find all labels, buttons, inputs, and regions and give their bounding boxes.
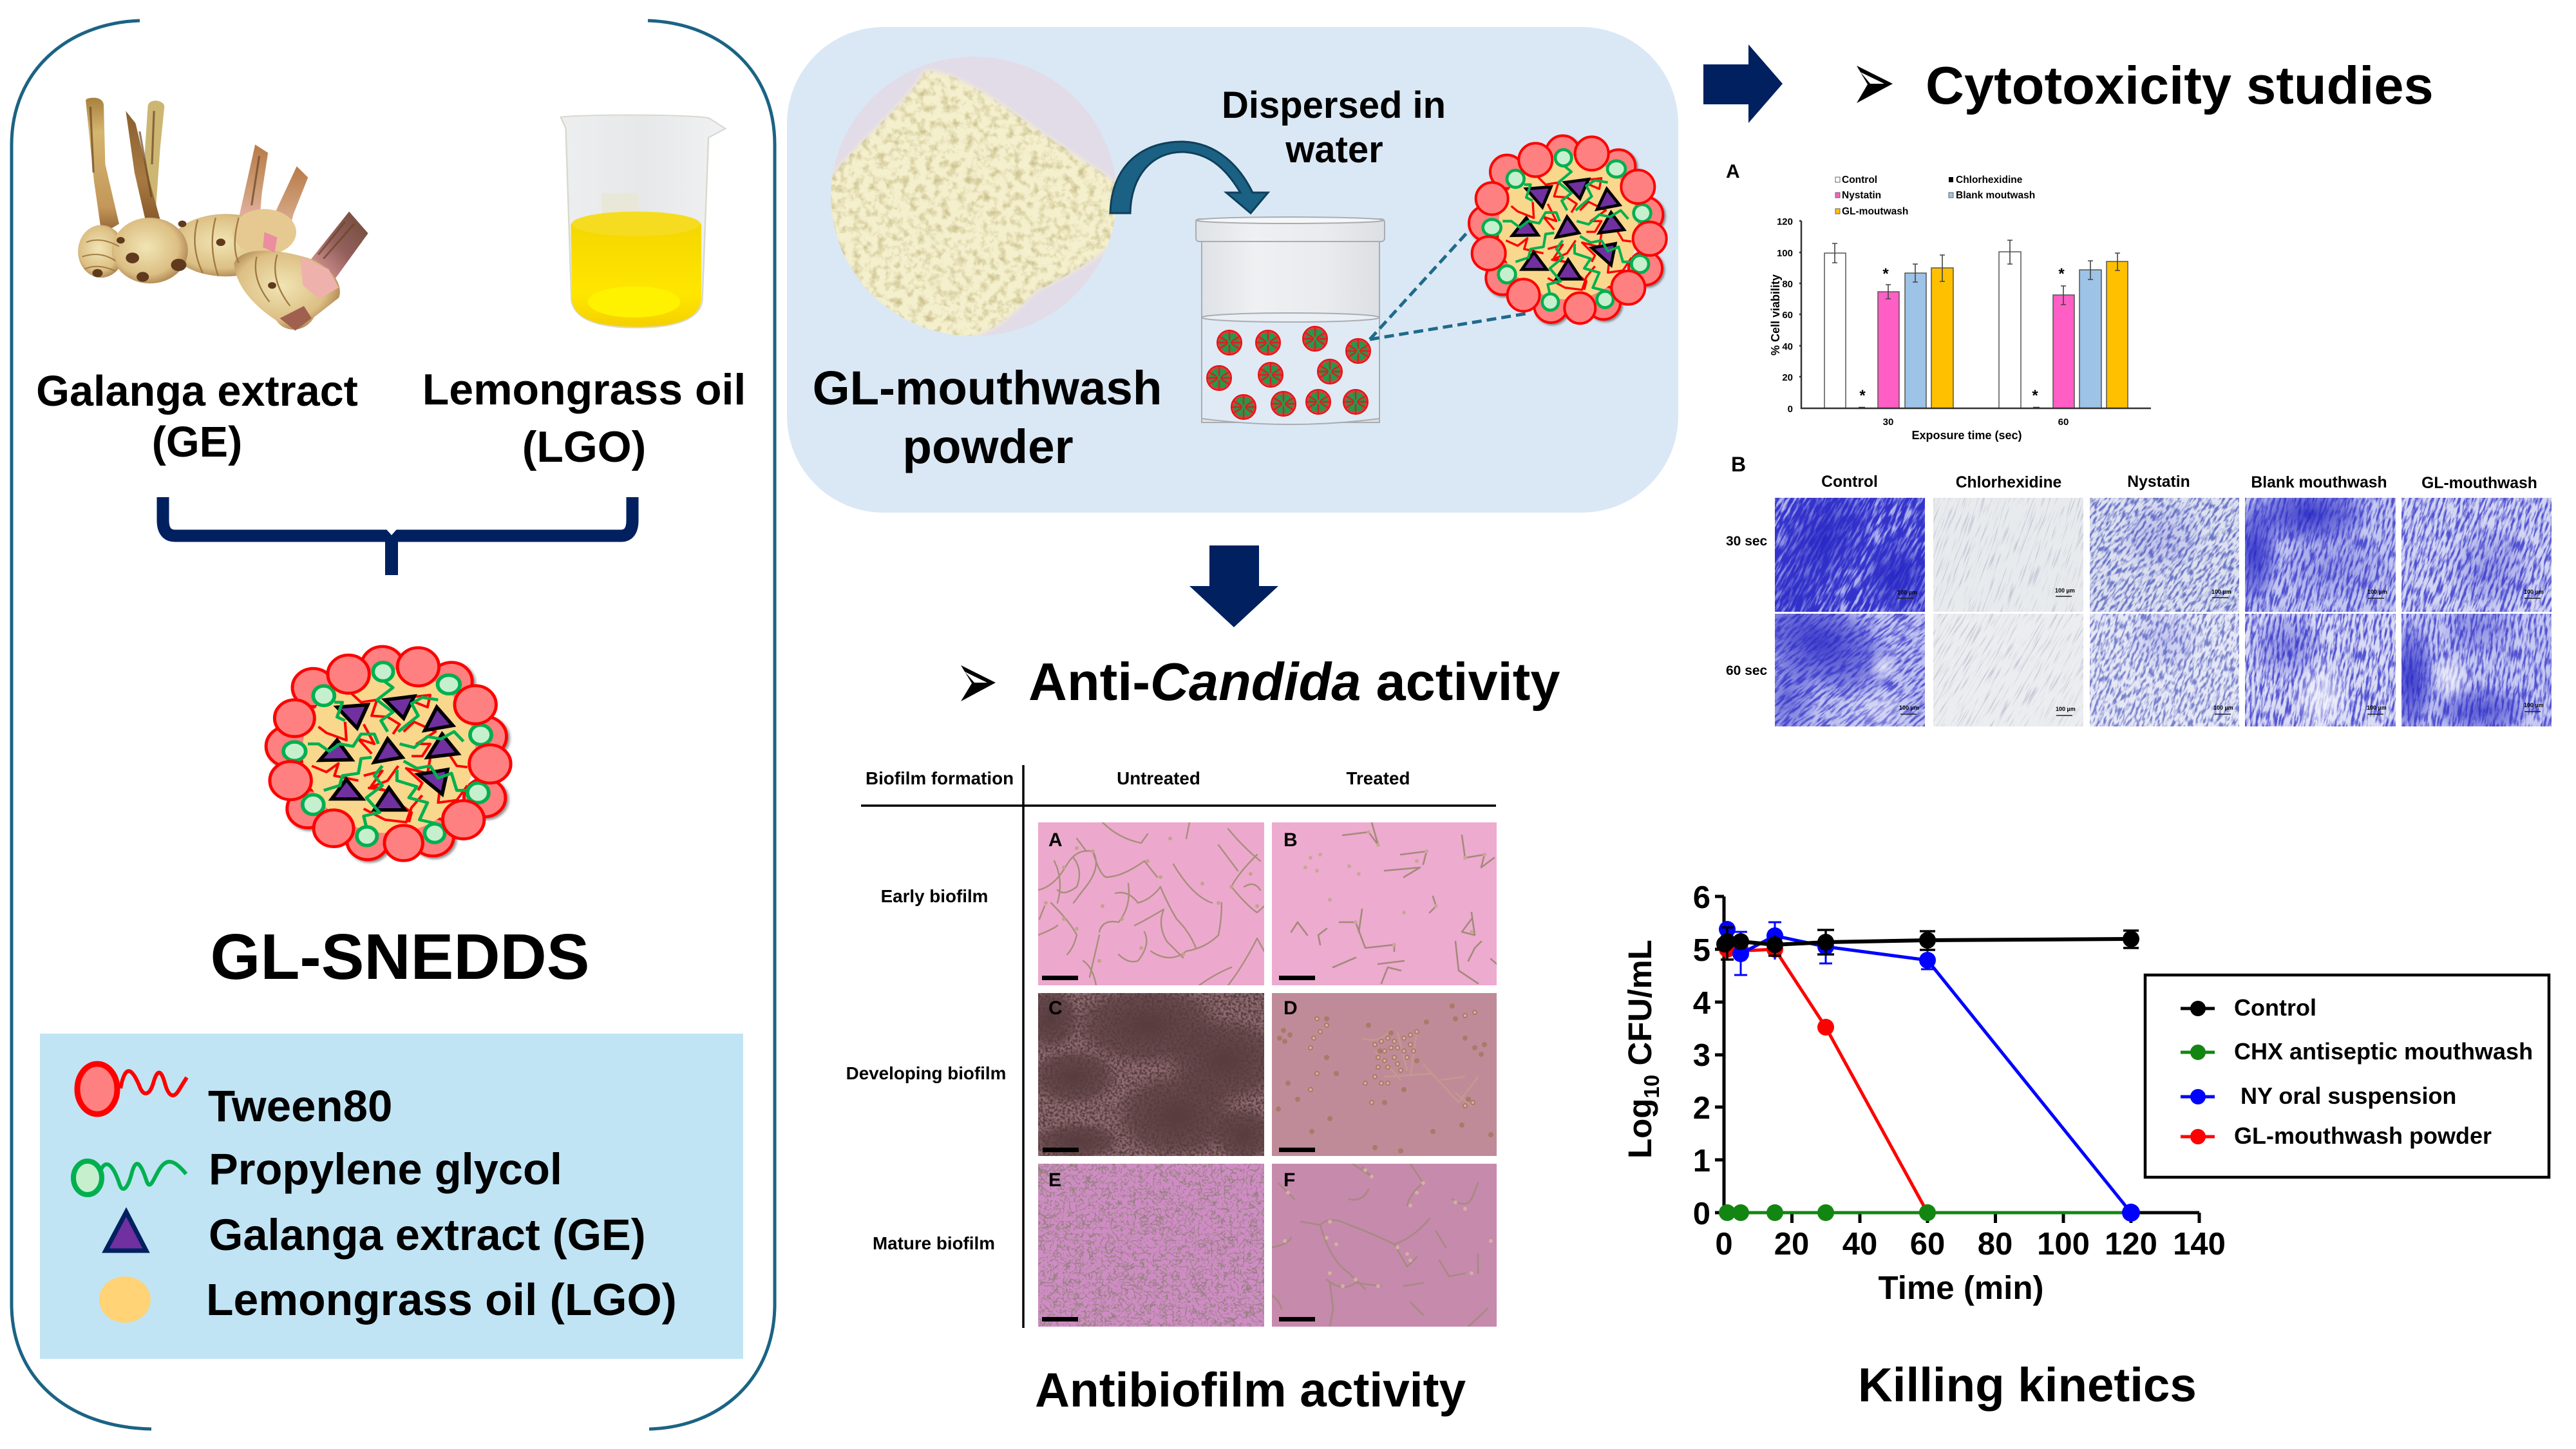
legend: killing kinetics: GL-mouthwash powder xyxy=(2234,1122,2492,1149)
axis numbers: 4 xyxy=(1693,986,1710,1021)
heading: antibiofilm activity: Antibiofilm activity xyxy=(1035,1363,1466,1417)
axis numbers: 0 xyxy=(1715,1227,1733,1262)
icon: joining bracket xyxy=(163,497,632,536)
chart: cell viability bars: % Cell viability xyxy=(1769,274,1782,355)
axis numbers: 6 xyxy=(1693,880,1710,915)
text: dispersed in water: Dispersed in xyxy=(1222,84,1446,126)
micrograph: C developing untreated xyxy=(1038,993,1264,1156)
axis numbers: 1 xyxy=(1693,1144,1710,1179)
legend: killing kinetics: NY oral suspension xyxy=(2240,1083,2456,1109)
panel: cell staining micrographs: Blank mouthwash xyxy=(2251,474,2387,491)
micrograph: control 30 sec: 100 µm xyxy=(1897,589,1917,596)
panel: cell staining micrographs: Chlorhexidine xyxy=(1956,474,2061,491)
text: galanga extract label xyxy=(36,368,358,466)
micrograph: control 30 sec xyxy=(1775,498,1925,612)
heading: anti-Candida activity: Anti-Candida activity xyxy=(1028,652,1560,712)
chart: killing kinetics xyxy=(1622,880,2549,1306)
axis numbers: 80 xyxy=(1978,1227,2012,1262)
chart: cell viability bars: * xyxy=(1882,265,1889,283)
panel: component legend xyxy=(40,1034,743,1359)
axis title: log CFU: 10 xyxy=(1640,1075,1663,1099)
panel: cell staining micrographs: Nystatin xyxy=(2127,473,2190,491)
legend: killing kinetics: CHX antiseptic mouthwash xyxy=(2234,1038,2533,1065)
axes and tick marks xyxy=(1715,896,2199,1223)
micrograph: GL-mouthwash 60 sec xyxy=(2401,614,2552,726)
icon: galanga rhizome xyxy=(78,98,368,330)
micrograph: nystatin 30 sec xyxy=(2090,498,2239,612)
text: propylene glycol: Propylene glycol xyxy=(209,1144,562,1194)
series: control xyxy=(1716,927,2139,960)
micrograph: nystatin 30 sec: 100 µm xyxy=(2211,589,2231,595)
axis numbers: 3 xyxy=(1693,1038,1710,1073)
axis numbers: 0 xyxy=(1693,1197,1710,1231)
chart: cell viability bars: 40 xyxy=(1782,341,1793,352)
micrograph: chlorhexidine 30 sec xyxy=(1933,498,2083,612)
micrograph: F mature treated xyxy=(1272,1164,1497,1327)
text: lemongrass oil label: (LGO) xyxy=(522,422,646,471)
micrograph: blank mouthwash 30 sec xyxy=(2245,498,2396,612)
panel: cell staining micrographs: 60 sec xyxy=(1726,663,1768,678)
micrograph: blank mouthwash 30 sec: 100 µm xyxy=(2367,589,2387,595)
legend: viability xyxy=(1835,175,2035,217)
legend: viability: GL-moutwash xyxy=(1842,206,1908,217)
icon: bracket notch xyxy=(386,529,397,535)
chart: cell viability bars: 20 xyxy=(1782,372,1793,383)
arrow: to cytotoxicity xyxy=(1703,44,1783,123)
text: GL-mouthwash powder: powder xyxy=(902,419,1074,473)
text: dispersed in water xyxy=(1222,84,1446,171)
text: GL-mouthwash powder xyxy=(813,361,1162,473)
chart: cell viability bars: 100 xyxy=(1777,248,1793,259)
chart: cell viability bars: * xyxy=(2032,387,2038,404)
micrograph: chlorhexidine 60 sec xyxy=(1933,614,2083,726)
axis numbers: 20 xyxy=(1774,1227,1809,1262)
panel: cell staining micrographs: GL-mouthwash xyxy=(2421,475,2537,492)
legend: viability: Chlorhexidine xyxy=(1956,175,2023,185)
axis numbers: 2 xyxy=(1693,1091,1710,1126)
legend: killing kinetics xyxy=(2145,975,2549,1177)
text: GL-mouthwash powder: GL-mouthwash xyxy=(813,361,1162,415)
chart: cell viability bars: Exposure time (sec) xyxy=(1911,429,2022,442)
text: galanga extract label: Galanga extract xyxy=(36,368,358,415)
text: lemongrass oil label xyxy=(422,365,746,471)
axis numbers: 100 xyxy=(2037,1227,2090,1262)
chart: cell viability bars: 60 xyxy=(1782,310,1793,321)
micrograph: control 60 sec xyxy=(1775,614,1925,726)
axis numbers xyxy=(1693,880,2226,1262)
series: NY oral suspension xyxy=(1719,921,2140,1222)
table: biofilm formation micrographs: Treated xyxy=(1347,768,1410,788)
panel: GL-mouthwash powder xyxy=(787,27,1678,513)
table: biofilm formation micrographs: Early biofilm xyxy=(881,886,988,906)
micrograph: nystatin 60 sec xyxy=(2090,614,2239,726)
axis numbers: 140 xyxy=(2173,1227,2226,1262)
text: Tween80: Tween80 xyxy=(208,1081,392,1131)
heading: GL-SNEDDS: GL-SNEDDS xyxy=(211,921,589,993)
text: galanga extract: Galanga extract (GE) xyxy=(209,1210,646,1260)
micrograph: B early treated xyxy=(1272,822,1497,985)
text: lemongrass oil: Lemongrass oil (LGO) xyxy=(206,1274,677,1325)
micrograph: B early treated: B xyxy=(1283,829,1298,851)
chart: cell viability bars: 30 xyxy=(1883,417,1893,428)
series: GL-mouthwash powder xyxy=(1719,941,1936,1221)
chart: cell viability bars: 120 xyxy=(1777,216,1793,227)
micrograph: D developing treated xyxy=(1272,993,1497,1156)
chart: cell viability bars xyxy=(1726,161,2151,442)
chart: cell viability bars: 0 xyxy=(1788,404,1793,415)
legend: viability: Nystatin xyxy=(1842,190,1881,201)
heading: killing kinetics: Killing kinetics xyxy=(1858,1358,2197,1412)
chart: cell viability bars: 60 xyxy=(2058,417,2069,428)
axis title: time: Time (min) xyxy=(1879,1269,2043,1306)
table: biofilm formation micrographs: Biofilm formation xyxy=(866,768,1014,788)
micrograph: F mature treated: F xyxy=(1283,1170,1295,1191)
text: dispersed in water: water xyxy=(1285,129,1383,171)
micrograph: chlorhexidine 60 sec: 100 µm xyxy=(2056,706,2076,712)
axis numbers: 120 xyxy=(2105,1227,2157,1262)
panel: ingredients frame xyxy=(12,21,775,1429)
icon: powder photo xyxy=(828,57,1122,341)
chart: cell viability bars: * xyxy=(2058,265,2065,283)
micrograph: GL-mouthwash 30 sec: 100 µm xyxy=(2524,589,2544,595)
table: biofilm formation micrographs xyxy=(846,765,1501,1449)
icon: galanga extract triangle xyxy=(106,1212,146,1251)
icon: beaker of lemongrass oil xyxy=(561,115,725,328)
micrograph: control 60 sec: 100 µm xyxy=(1899,705,1919,711)
micrograph: blank mouthwash 60 sec xyxy=(2245,614,2396,726)
chart: cell viability bars: * xyxy=(1859,387,1866,404)
micrograph: A early untreated: A xyxy=(1048,829,1063,851)
chart: cell viability bars: 80 xyxy=(1782,279,1793,290)
axis numbers: 40 xyxy=(1842,1227,1877,1262)
legend: killing kinetics: Control xyxy=(2234,994,2316,1021)
axis title: log CFU: Log xyxy=(1622,1099,1658,1159)
bars: viability values xyxy=(1824,252,2128,408)
panel: cell staining micrographs xyxy=(1647,349,2576,873)
icon: propylene glycol xyxy=(73,1161,186,1195)
micrograph: chlorhexidine 30 sec: 100 µm xyxy=(2055,587,2075,594)
panel: cell staining micrographs: 30 sec xyxy=(1726,534,1768,549)
text: galanga extract label: (GE) xyxy=(152,419,242,466)
panel: cell staining micrographs: B xyxy=(1731,453,1746,476)
text: lemongrass oil label: Lemongrass oil xyxy=(422,365,746,414)
icon: lemongrass oil droplet xyxy=(99,1276,151,1323)
micrograph: E mature untreated: E xyxy=(1048,1170,1061,1191)
micrograph: blank mouthwash 60 sec: 100 µm xyxy=(2367,705,2387,711)
micrograph: nystatin 60 sec: 100 µm xyxy=(2213,705,2233,711)
icon: jar of dispersed particles xyxy=(1196,217,1385,424)
micrograph: D developing treated: D xyxy=(1283,998,1298,1019)
arrow: curved dispersal arrow xyxy=(1110,142,1268,213)
heading: cytotoxicity studies: Cytotoxicity studies xyxy=(1926,55,2434,115)
micrograph: C developing untreated: C xyxy=(1048,998,1063,1019)
icon: anti-Candida bullet xyxy=(961,665,996,701)
callout: magnification dashed lines xyxy=(1370,230,1526,339)
micrograph: GL-mouthwash 30 sec xyxy=(2401,498,2552,612)
table: biofilm formation micrographs: Developing biofilm xyxy=(846,1063,1006,1083)
axis title: log CFU: CFU/mL xyxy=(1622,940,1658,1075)
table: biofilm formation micrographs: Untreated xyxy=(1117,768,1200,788)
icon: enlarged nanoparticle xyxy=(1469,136,1667,323)
icon: GL-SNEDDS nanoparticle xyxy=(266,647,511,860)
icon: Tween80 xyxy=(77,1064,187,1114)
micrograph: A early untreated xyxy=(1038,822,1264,985)
panel: cell staining micrographs: Control xyxy=(1821,473,1878,491)
icon: cytotoxicity bullet xyxy=(1857,66,1893,103)
axis numbers: 5 xyxy=(1693,933,1710,968)
table: biofilm formation micrographs: Mature biofilm xyxy=(873,1233,995,1253)
icon: bracket stem xyxy=(380,540,403,575)
axis numbers: 60 xyxy=(1910,1227,1945,1262)
chart: cell viability bars: A xyxy=(1726,161,1740,182)
micrograph: GL-mouthwash 60 sec: 100 µm xyxy=(2524,702,2544,708)
micrograph: E mature untreated xyxy=(1038,1164,1264,1327)
legend: viability: Blank moutwash xyxy=(1956,190,2035,201)
legend: viability: Control xyxy=(1842,175,1877,185)
arrow: to anti-Candida xyxy=(1189,545,1278,627)
series: CHX xyxy=(1719,1204,2131,1221)
